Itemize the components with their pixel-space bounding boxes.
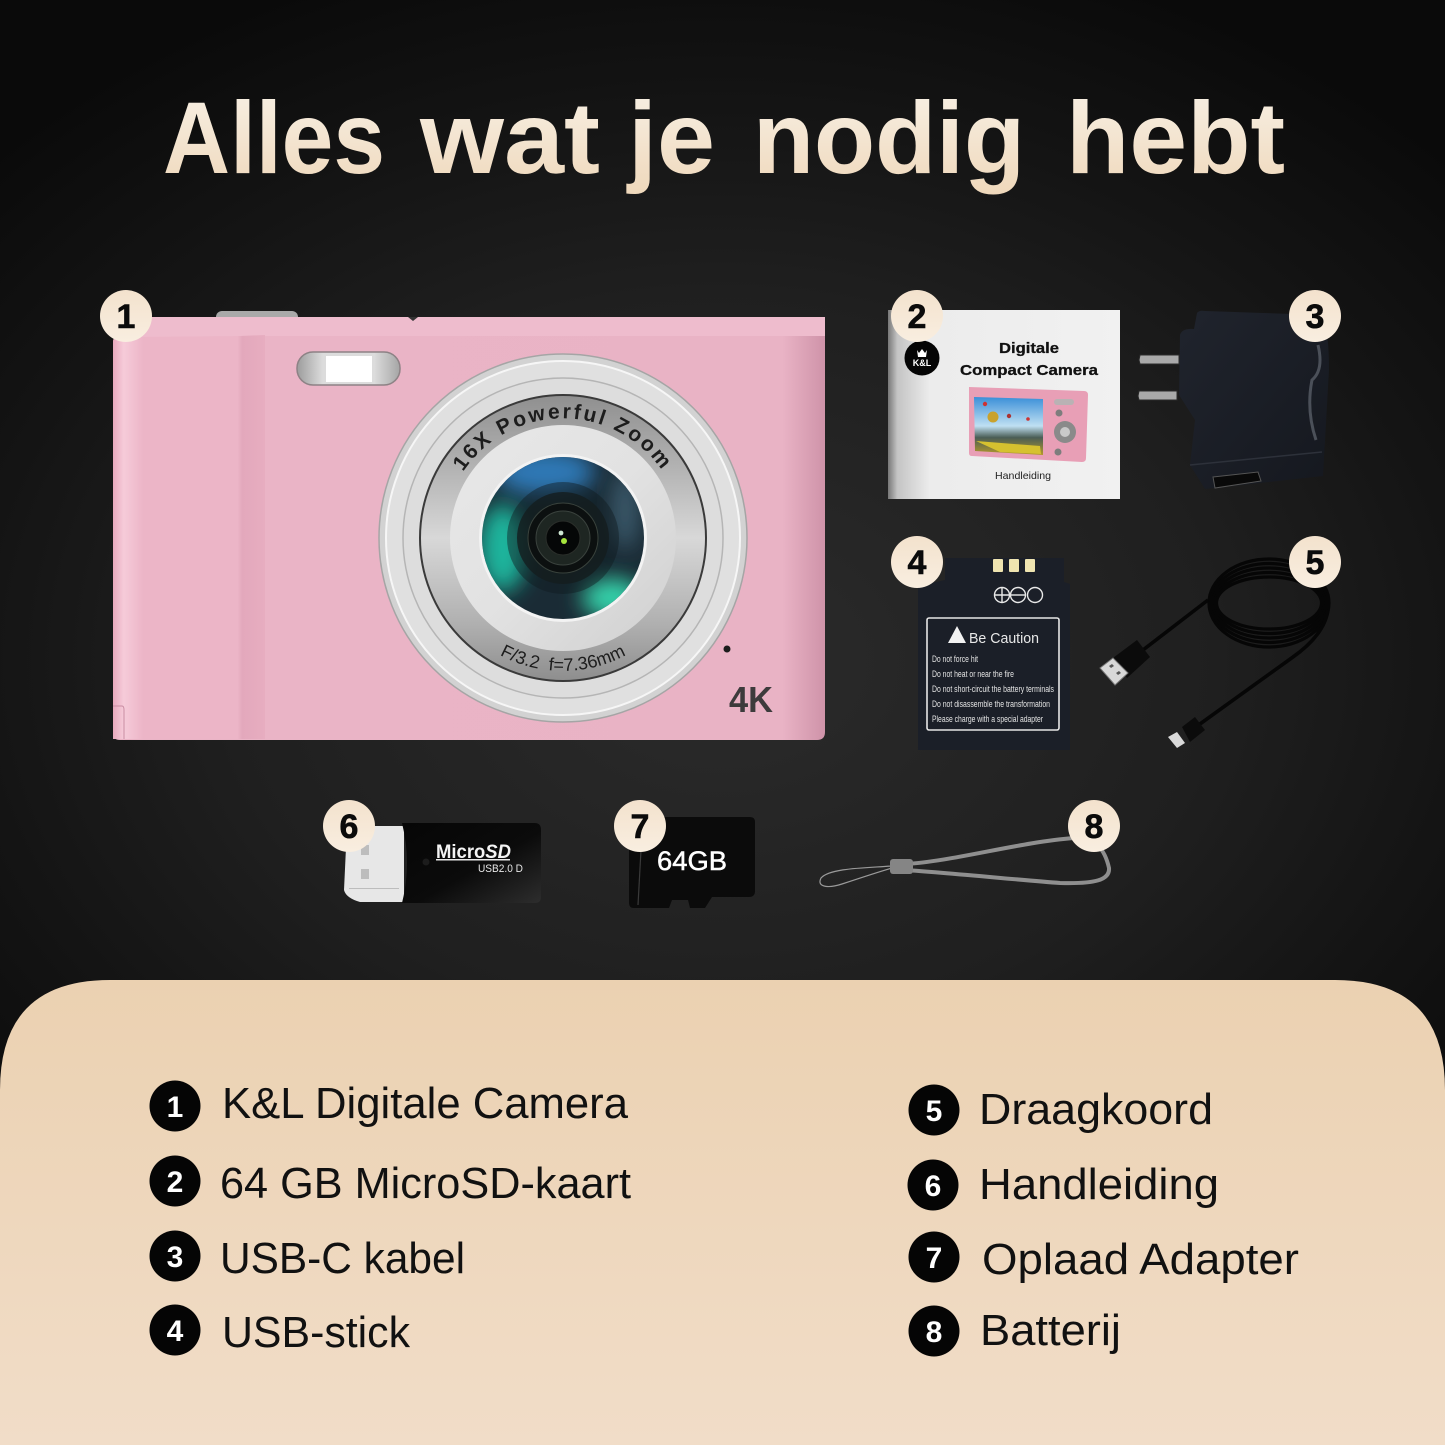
- list item 8: Batterij: [980, 1306, 1121, 1355]
- list item 6: 6: [925, 1170, 941, 1203]
- adapter housing: [1179, 311, 1329, 489]
- product: printed manual: [888, 310, 1120, 499]
- camera flash: [297, 352, 400, 385]
- list item 3: USB-C kabel: [220, 1234, 465, 1283]
- adapter prongs: [1138, 355, 1179, 400]
- list item 1: 1: [167, 1091, 183, 1124]
- list item 8: 8: [926, 1316, 942, 1349]
- mini camera picture: [969, 387, 1088, 462]
- badge 3: 3: [1306, 298, 1324, 336]
- camera side door: [113, 706, 124, 739]
- card edge line: [638, 850, 641, 905]
- badge 3: [1289, 290, 1341, 342]
- badge 7: 7: [631, 808, 649, 846]
- USB-C plug: [1168, 717, 1205, 748]
- battery contacts: [993, 559, 1035, 572]
- title: hebt: [1066, 81, 1285, 195]
- badge 4: [891, 536, 943, 588]
- battery body: [918, 558, 1070, 750]
- list item 2: 64 GB MicroSD-kaart: [220, 1159, 631, 1208]
- list item 7: Oplaad Adapter: [982, 1235, 1299, 1284]
- manual heading: [960, 340, 1099, 379]
- list item 7: 7: [926, 1242, 942, 1275]
- camera grip: [113, 335, 265, 739]
- list item 6: Handleiding: [979, 1160, 1219, 1209]
- badge 8: 8: [1085, 808, 1103, 846]
- product: charging adapter: [1138, 311, 1329, 489]
- battery polarity symbols: [994, 588, 1042, 602]
- manual caption: Handleiding: [995, 470, 1051, 482]
- product: pink digital camera: [113, 311, 825, 740]
- battery warning label: Do not disassemble the transformation: [932, 699, 1050, 709]
- badge 5: 5: [1306, 544, 1324, 582]
- camera body: [113, 317, 825, 740]
- battery warning label: [927, 618, 1059, 730]
- strap main loop: [905, 838, 1109, 883]
- adapter lower bevel: [1190, 452, 1322, 465]
- reader white cap: [344, 826, 404, 902]
- list item 4: USB-stick: [222, 1308, 411, 1357]
- badge 4: 4: [908, 544, 927, 582]
- list item 8: [908, 1306, 1121, 1356]
- badge 5: [1289, 536, 1341, 588]
- camera shutter button: [216, 311, 298, 323]
- title: Alles: [163, 81, 385, 195]
- list item 5: 5: [926, 1095, 942, 1128]
- K&L logo: K&L: [913, 358, 932, 368]
- adapter USB port: [1213, 472, 1261, 488]
- battery warning label: Do not force hit: [932, 654, 978, 664]
- battery warning label: Be Caution: [969, 631, 1039, 647]
- list item 2: 2: [167, 1166, 183, 1199]
- reader microSD logo: MicroSD: [436, 842, 511, 863]
- list item 4: [150, 1304, 411, 1357]
- product: card reader: [344, 823, 541, 903]
- reader black body: [402, 823, 541, 903]
- product: 64GB microSD card: [629, 817, 755, 908]
- reader cap detail: [349, 845, 399, 889]
- 4K mark: 4K: [729, 679, 773, 720]
- lens outer ring: [379, 354, 747, 722]
- card capacity: 64GB: [657, 846, 727, 876]
- lens ring text: aperture and focal length: F/3.2 f=7.36mm: [501, 644, 626, 671]
- cable coil: [1143, 559, 1329, 729]
- adapter side highlight: [1310, 345, 1320, 440]
- product: wrist strap: [820, 838, 1109, 886]
- battery warning label: Please charge with a special adapter: [932, 714, 1043, 724]
- title: [163, 81, 1285, 195]
- USB-A plug: [1100, 640, 1150, 685]
- list item 1: K&L Digitale Camera: [222, 1079, 629, 1128]
- manual cover: [888, 310, 1120, 499]
- battery warning label: Do not heat or near the fire: [932, 669, 1014, 679]
- list item 5: Draagkoord: [979, 1085, 1213, 1134]
- badge 7: [614, 800, 666, 852]
- card shape: [629, 817, 755, 908]
- K&L logo: [904, 340, 940, 376]
- badge 6: 6: [340, 808, 358, 846]
- badge 1: 1: [117, 298, 135, 336]
- lens ring text: 16X Powerful Zoom: 16X Powerful Zoom: [454, 404, 668, 471]
- strap thin loop: [820, 866, 892, 886]
- panel: contents list: [0, 980, 1445, 1445]
- camera viewfinder notch: [408, 317, 418, 321]
- title: wat: [419, 81, 600, 195]
- title: nodig: [753, 81, 1025, 195]
- badge 6: [323, 800, 375, 852]
- manual heading: Compact Camera: [960, 362, 1099, 379]
- camera top edge: [140, 317, 825, 337]
- microphone dot: [724, 646, 730, 652]
- manual heading: Digitale: [999, 340, 1059, 357]
- badge 2: 2: [908, 298, 926, 336]
- strap clasp: [890, 859, 913, 874]
- badge 2: [891, 290, 943, 342]
- product: battery: [918, 558, 1070, 750]
- battery warning label: Do not short-circuit the battery terminals: [932, 684, 1054, 694]
- product: USB-C cable: [1100, 559, 1329, 748]
- badge 1: [100, 290, 152, 342]
- title: je: [626, 81, 715, 195]
- list item 4: 4: [167, 1315, 184, 1348]
- reader model text: USB2.0 D: [478, 863, 523, 875]
- badge 8: [1068, 800, 1120, 852]
- list item 3: 3: [167, 1241, 183, 1274]
- lens glass: [479, 448, 647, 622]
- reader indicator: [422, 858, 430, 866]
- reader logo underline: [436, 859, 510, 860]
